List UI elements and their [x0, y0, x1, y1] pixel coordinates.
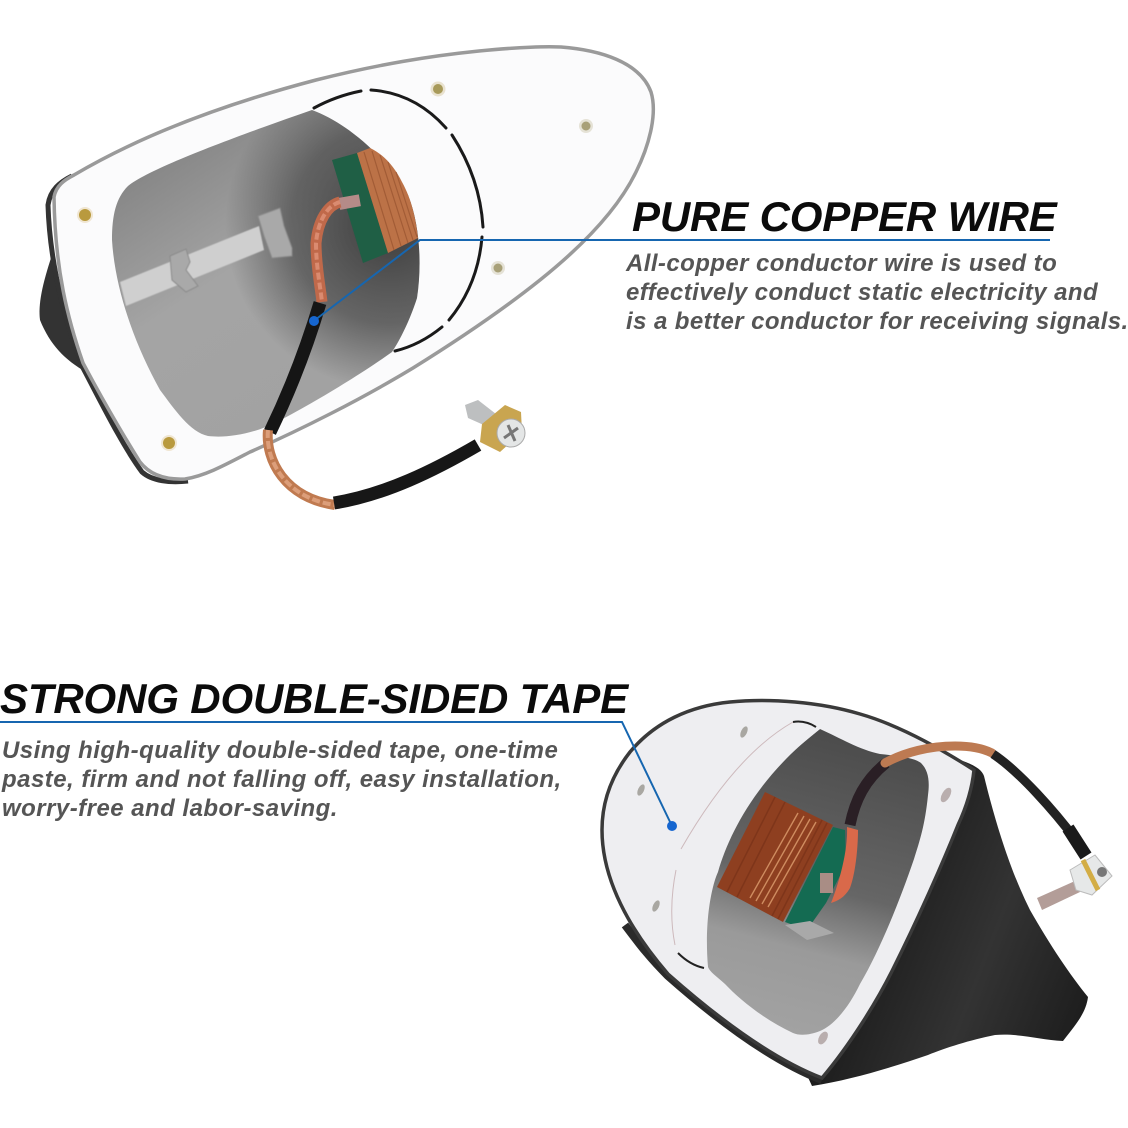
copper coil board [717, 792, 833, 922]
metal bracket [785, 921, 834, 940]
upper copper wire [316, 202, 340, 302]
dark plate rim [48, 176, 188, 482]
recess shadow [112, 110, 420, 437]
text: copper description: effectively conduct static electricity and [626, 279, 1098, 306]
connector body [1070, 855, 1112, 895]
screws [77, 82, 593, 451]
recess clips [170, 208, 292, 292]
connector [465, 400, 525, 452]
dark fin edge [40, 255, 86, 372]
heading: pure copper wire: PURE COPPER WIRE [632, 193, 1057, 240]
crescent dark tips [678, 722, 816, 968]
base plate [602, 700, 974, 1078]
recess strip [120, 226, 264, 306]
lower dark rim [625, 925, 822, 1080]
text: copper description [626, 250, 1128, 335]
green board [785, 827, 846, 930]
text: tape description: worry-free and labor-saving. [2, 795, 338, 822]
crescent end tips [678, 722, 820, 968]
copper coil [357, 148, 418, 253]
board pad [820, 873, 833, 893]
base plate [54, 47, 653, 479]
black cable [334, 445, 478, 503]
connector pin [1037, 881, 1080, 910]
leader dot: tape [667, 821, 677, 831]
leader line: copper wire [315, 240, 1050, 320]
copper wire on board [831, 827, 858, 903]
upper copper wire [885, 746, 992, 763]
text: tape description: Using high-quality double-sided tape, one-time [2, 737, 558, 764]
black cable [993, 754, 1076, 840]
dark wire in recess [850, 763, 886, 825]
green circuit board [332, 153, 388, 263]
heading: strong double-sided tape: STRONG DOUBLE-SIDED TAPE [0, 675, 628, 722]
text: tape description: paste, firm and not falling off, easy installation, [2, 766, 562, 793]
dark fin body [800, 760, 1088, 1086]
coil stripes [364, 151, 417, 250]
inner recess [707, 729, 929, 1035]
lower copper wire [268, 430, 335, 505]
antenna 2: angled view with dark fin [602, 700, 1112, 1086]
black sleeve [270, 303, 320, 432]
solder pad [338, 194, 361, 210]
text: copper description: is a better conductor for receiving signals. [626, 308, 1128, 335]
leader dot: copper wire [309, 316, 319, 326]
inner recess [112, 110, 420, 437]
leader line: tape [0, 722, 672, 826]
text: tape description [2, 737, 562, 822]
cable sleeve [1068, 828, 1086, 856]
text: copper description: All-copper conductor wire is used to [626, 250, 1057, 277]
coil stripes [750, 813, 816, 907]
coil fine stripes [727, 797, 827, 919]
antenna 1: top view of shark fin base [40, 47, 653, 505]
crescent arc lines [672, 722, 793, 945]
dashed arc [314, 90, 483, 351]
holes [636, 725, 953, 1046]
